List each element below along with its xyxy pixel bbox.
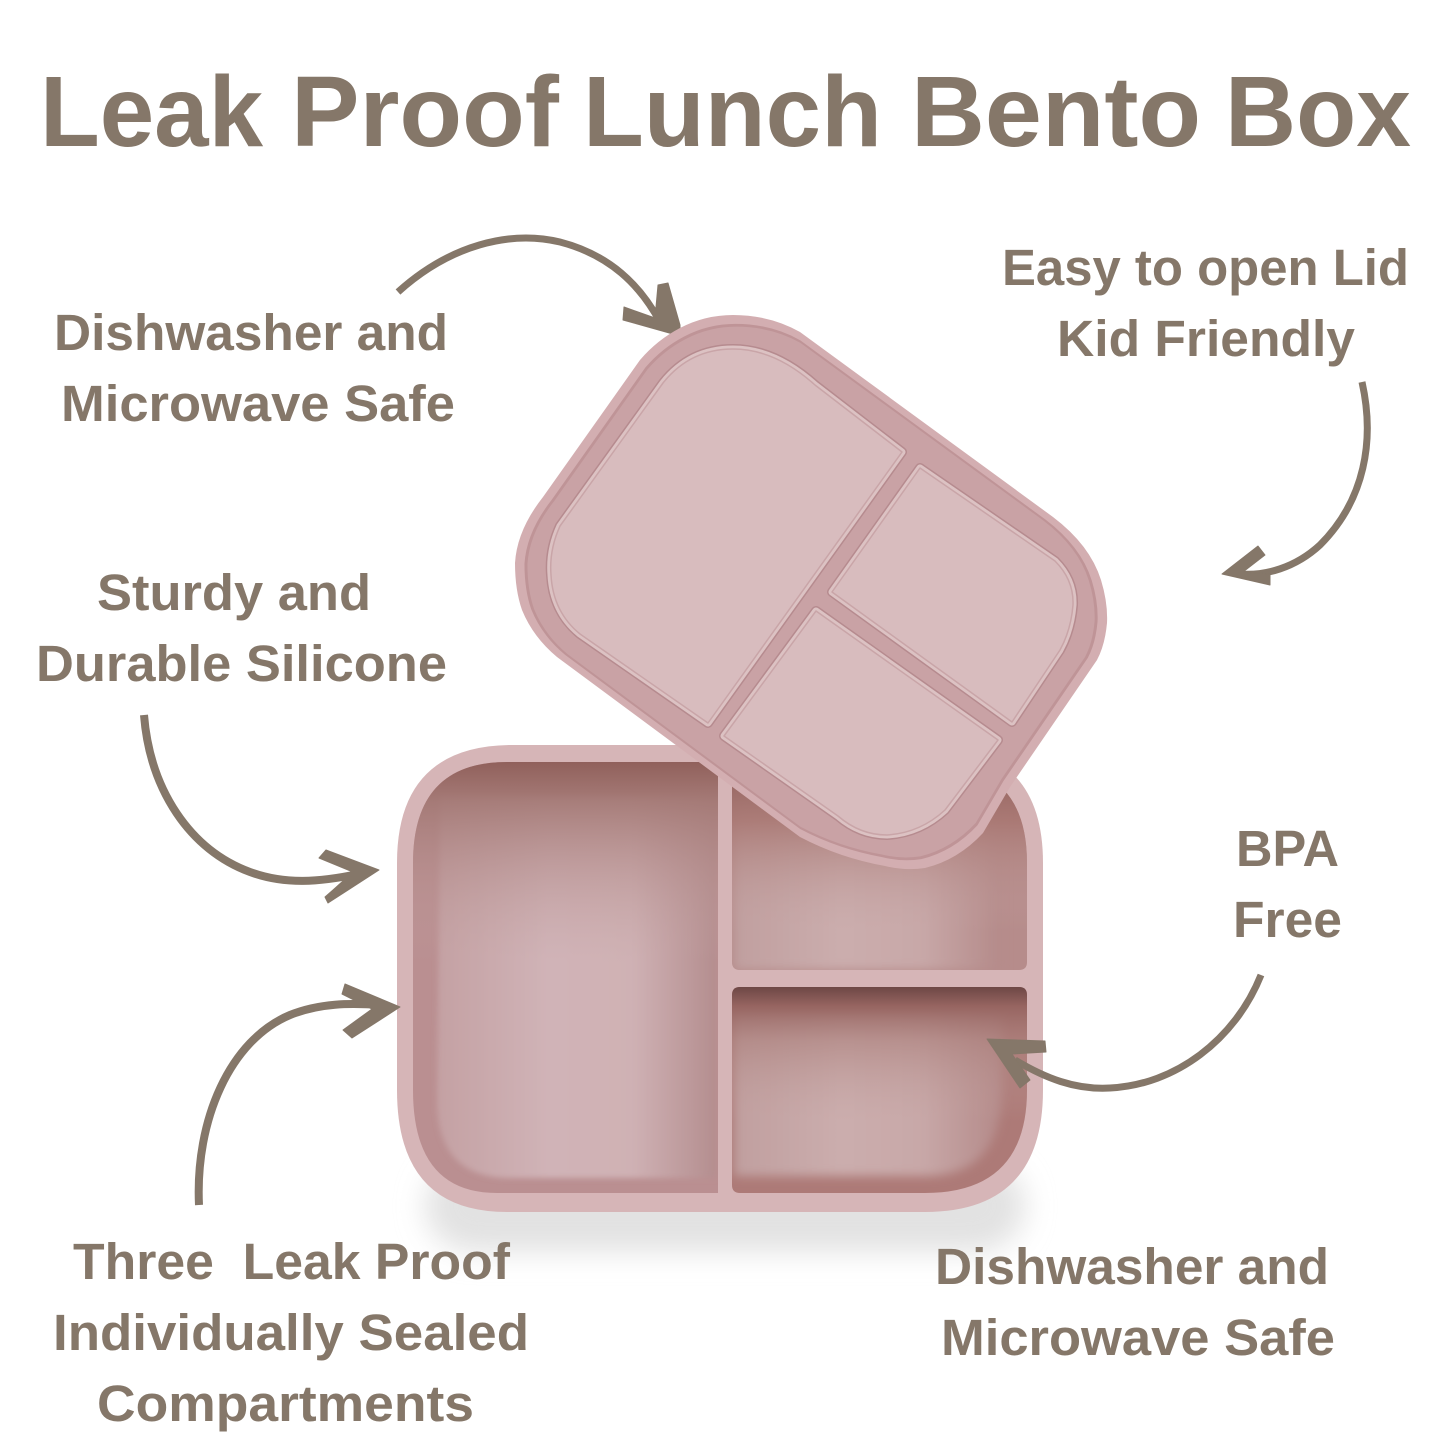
label: sturdy and durable silicone: Durable Silicone	[36, 635, 447, 692]
label: three leak proof compartments: Three Leak Proof	[73, 1233, 511, 1290]
title: Bento	[911, 56, 1201, 168]
arrow: from BPA label to box	[987, 975, 1261, 1088]
label: three leak proof compartments: Compartments	[97, 1375, 474, 1432]
label: easy to open lid: Easy to open Lid	[1002, 239, 1409, 296]
title: Proof	[291, 56, 560, 168]
label: easy to open lid	[1002, 239, 1409, 367]
lid outer rim	[515, 315, 1107, 869]
lid lower panel	[724, 611, 998, 835]
lid inner band	[527, 327, 1095, 857]
label: three leak proof compartments	[53, 1233, 529, 1432]
title: Lunch	[583, 56, 882, 168]
box outer rim	[397, 745, 1043, 1212]
arrow: from sealed compartments label to box	[199, 984, 400, 1205]
title: Box	[1225, 56, 1411, 168]
label: BPA free: Free	[1233, 891, 1342, 948]
title: Leak	[40, 56, 263, 168]
label: BPA free	[1233, 820, 1342, 948]
bento box base with compartments	[397, 745, 1043, 1212]
right bottom compartment	[730, 985, 1030, 1195]
label: dishwasher and microwave safe, top left	[54, 304, 455, 432]
bento lid	[515, 315, 1107, 869]
title	[40, 56, 1411, 168]
arrow: from silicone label to box	[144, 715, 379, 903]
lid large panel	[551, 349, 902, 723]
label: dishwasher and microwave safe, bottom right: Dishwasher and	[935, 1238, 1329, 1295]
lid rim groove	[524, 324, 1098, 860]
label: sturdy and durable silicone	[36, 564, 447, 692]
arrow: from easy to open label	[1222, 382, 1367, 585]
label: easy to open lid: Kid Friendly	[1057, 310, 1356, 367]
label: BPA free: BPA	[1236, 820, 1339, 877]
label: dishwasher and microwave safe, top left: Dishwasher and	[54, 304, 448, 361]
lid upper right panel	[832, 468, 1073, 722]
label: dishwasher and microwave safe, bottom right: Microwave Safe	[941, 1309, 1335, 1366]
right top compartment	[732, 786, 1027, 970]
left compartment	[410, 760, 720, 1200]
label: sturdy and durable silicone: Sturdy and	[97, 564, 371, 621]
label: dishwasher and microwave safe, bottom right	[935, 1238, 1335, 1366]
label: dishwasher and microwave safe, top left: Microwave Safe	[61, 375, 455, 432]
label: three leak proof compartments: Individually Sealed	[53, 1304, 529, 1361]
box ground shadow	[425, 1160, 1025, 1252]
arrow: to lid from dishwasher label	[398, 238, 680, 336]
